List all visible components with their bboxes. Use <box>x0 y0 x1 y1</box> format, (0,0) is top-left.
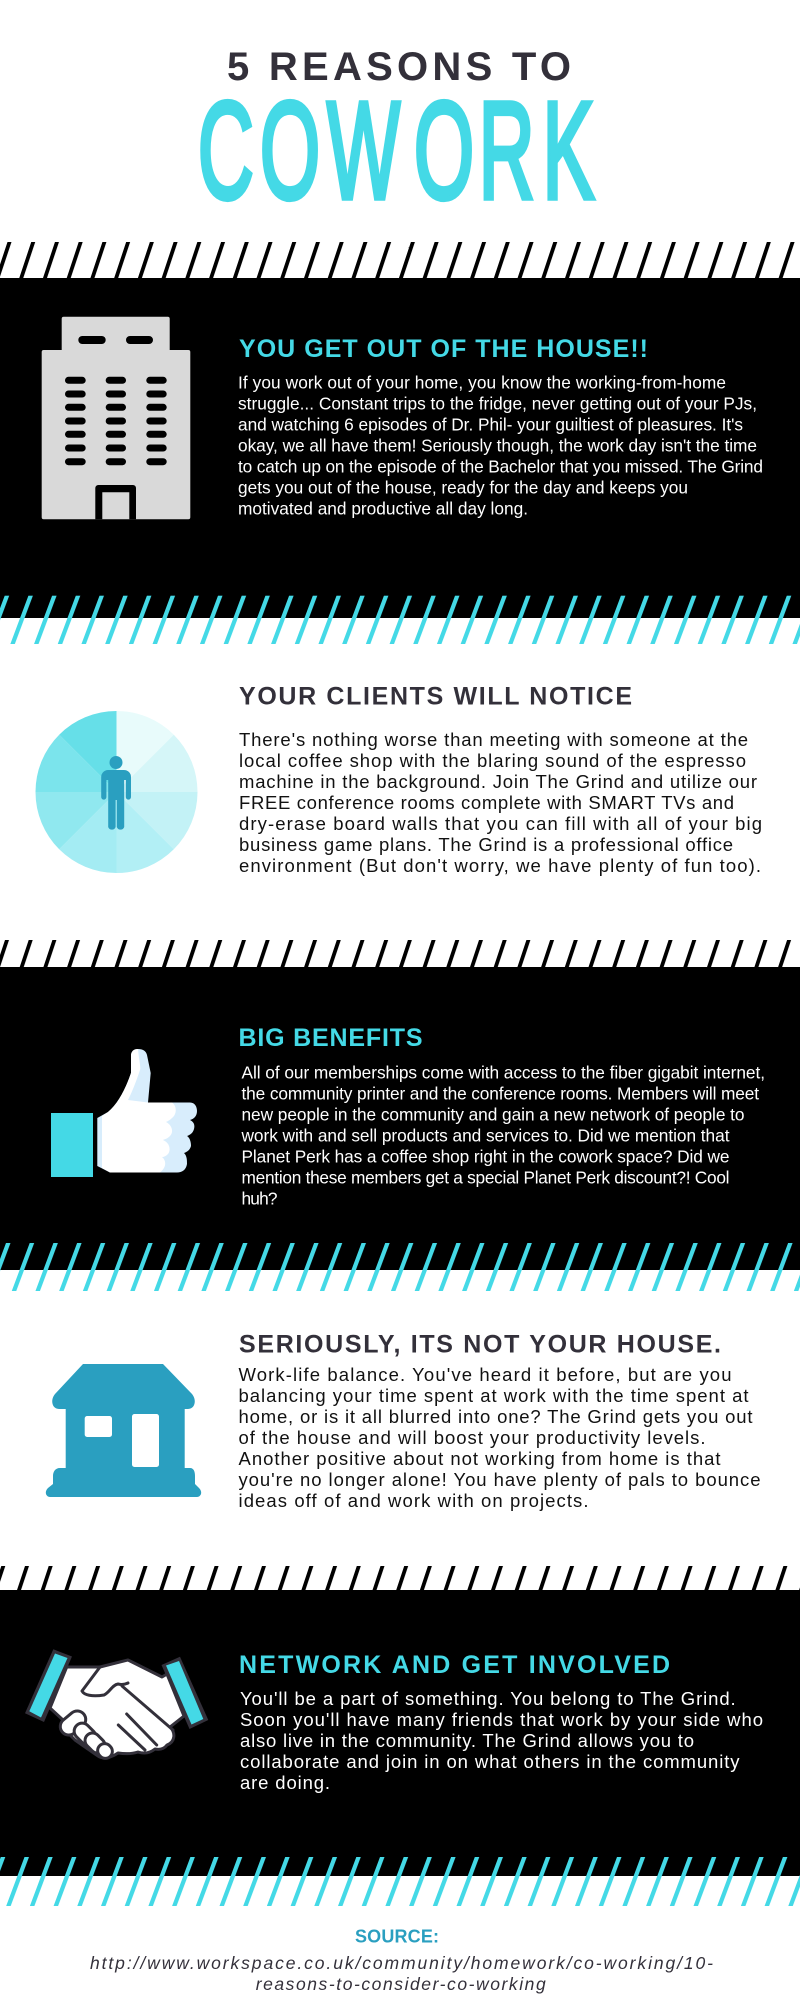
source <box>90 1927 713 1994</box>
text block <box>239 729 762 876</box>
icon: house <box>46 1364 201 1497</box>
text block: ideas off of and work with on projects. <box>238 1490 588 1511</box>
text block: the community printer and the conference rooms. Members will meet <box>242 1083 759 1103</box>
text block: business game plans. The Grind is a professional office <box>239 834 733 855</box>
text block: work with and sell products and services to. Did we mention that <box>240 1125 730 1145</box>
title: COWORK <box>198 73 594 228</box>
text block <box>238 1364 760 1511</box>
text block: okay, we all have them! Seriously though, the work day isn't the time <box>238 435 757 455</box>
text block: motivated and productive all day long. <box>238 498 528 518</box>
icon: thumbs up <box>51 1049 197 1177</box>
heading: NETWORK AND GET INVOLVED <box>239 1651 670 1679</box>
heading: BIG BENEFITS <box>238 1024 422 1052</box>
heading: YOU GET OUT OF THE HOUSE!! <box>239 335 648 363</box>
panel: your clients will notice <box>35 682 762 876</box>
source: SOURCE: <box>355 1927 439 1947</box>
text block <box>240 1062 765 1208</box>
text block <box>240 1688 763 1793</box>
heading: SERIOUSLY, ITS NOT YOUR HOUSE. <box>239 1330 721 1358</box>
panel: big benefits <box>0 967 800 1270</box>
heading: YOUR CLIENTS WILL NOTICE <box>239 682 632 710</box>
icon: office building <box>42 317 190 519</box>
panel: you get out of the house <box>0 278 800 618</box>
text block: local coffee shop with the blaring sound of the espresso <box>239 750 746 771</box>
text block: You'll be a part of something. You belong to The Grind. <box>240 1688 736 1709</box>
text block: new people in the community and gain a new network of people to <box>242 1104 744 1124</box>
text block: All of our memberships come with access to the fiber gigabit internet, <box>242 1062 765 1082</box>
text block: Another positive about not working from home is that <box>238 1448 720 1469</box>
text block: mention these members get a special Planet Perk discount?! Cool <box>242 1167 730 1187</box>
text block: Work-life balance. You've heard it before, but are you <box>238 1364 732 1385</box>
text block: huh? <box>242 1188 278 1208</box>
text block: dry-erase board walls that you can fill with all of your big <box>239 813 762 834</box>
text block: balancing your time spent at work with the time spent at <box>238 1385 748 1406</box>
text block <box>238 372 763 518</box>
text block: There's nothing worse than meeting with someone at the <box>239 729 748 750</box>
text block: Planet Perk has a coffee shop right in the cowork space? Did we <box>242 1146 730 1166</box>
source: reasons-to-consider-co-working <box>256 1974 546 1994</box>
text block: home, or is it all blurred into one? The Grind gets you out <box>238 1406 752 1427</box>
text block: collaborate and join in on what others in the community <box>240 1751 740 1772</box>
text block: of the house and will boost your productivity levels. <box>238 1427 706 1448</box>
source: http://www.workspace.co.uk/community/homework/co-working/10- <box>90 1953 713 1973</box>
title: 5 REASONS TO <box>227 45 571 89</box>
text block: FREE conference rooms complete with SMART TVs and <box>239 792 734 813</box>
panel: network and get involved <box>0 1590 800 1876</box>
text block: If you work out of your home, you know the working-from-home <box>238 372 726 392</box>
text block: machine in the background. Join The Grind and utilize our <box>239 771 757 792</box>
text block: and watching 6 episodes of Dr. Phil- your guiltiest of pleasures. It's <box>238 414 743 434</box>
text block: gets you out of the house, ready for the day and keeps you <box>238 477 688 497</box>
text block: also live in the community. The Grind allows you to <box>240 1730 694 1751</box>
text block: you're no longer alone! You have plenty of pals to bounce <box>238 1469 760 1490</box>
text block: are doing. <box>240 1772 330 1793</box>
text block: environment (But don't worry, we have plenty of fun too). <box>239 855 761 876</box>
text block: to catch up on the episode of the Bachelor that you missed. The Grind <box>238 456 763 476</box>
text block: Soon you'll have many friends that work by your side who <box>240 1709 763 1730</box>
panel: seriously, its not your house <box>46 1330 761 1511</box>
icon: person on radial pie <box>35 711 198 873</box>
icon: handshake <box>25 1649 208 1761</box>
text block: struggle... Constant trips to the fridge, never getting out of your PJs, <box>238 393 757 413</box>
